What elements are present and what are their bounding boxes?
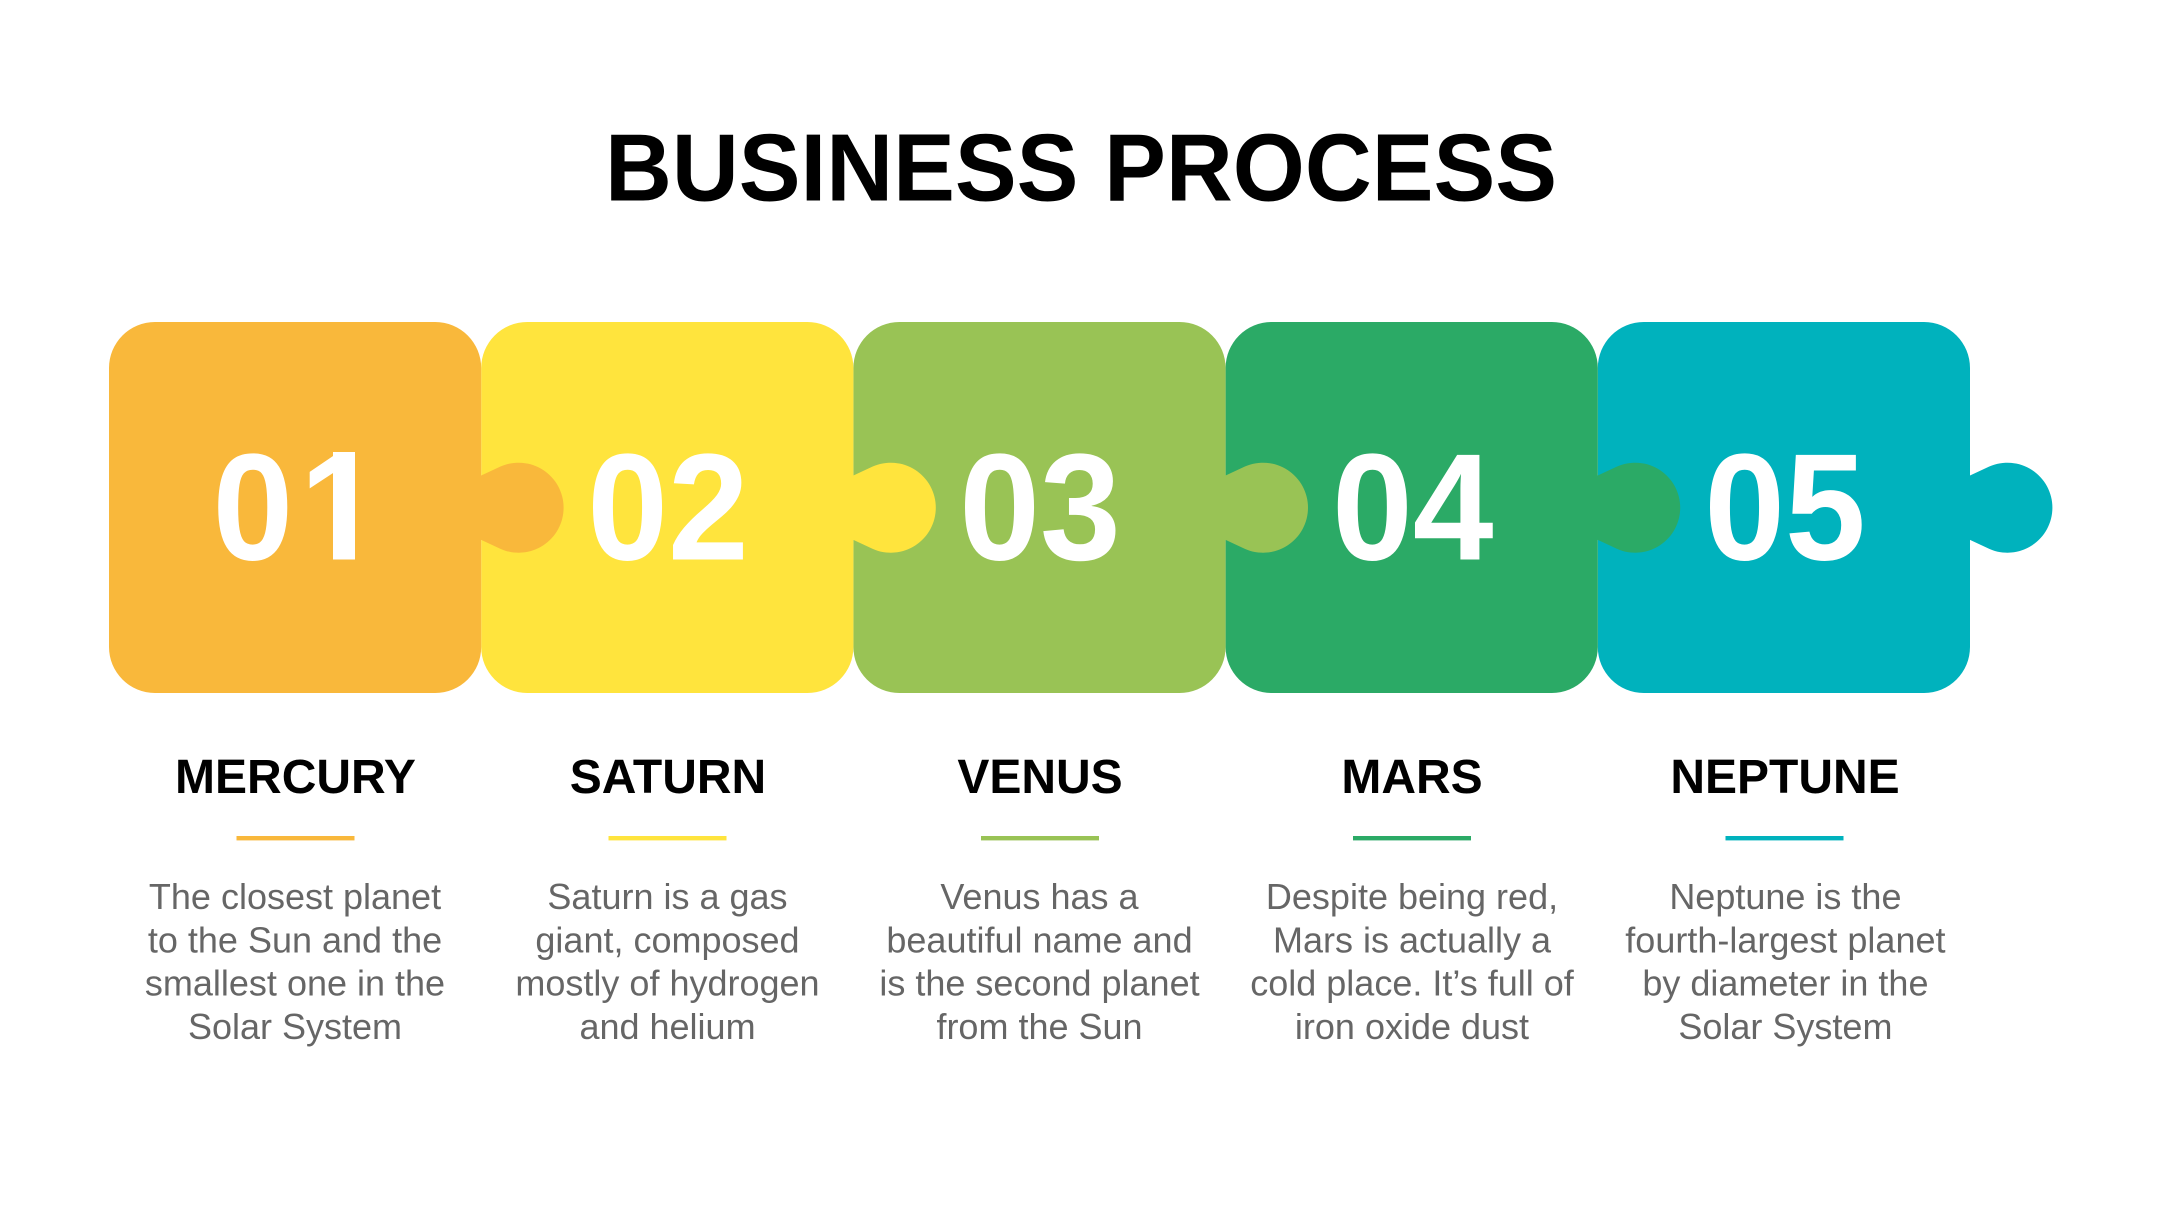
- rule: Neptune: [1726, 836, 1844, 840]
- rule: Mercury: [236, 836, 354, 840]
- heading: Mars: MARS: [1341, 751, 1483, 804]
- description: Venus: Venus has a: [940, 876, 1140, 917]
- heading: Mercury: MERCURY: [175, 751, 416, 804]
- description: Neptune: Neptune is the: [1669, 876, 1901, 917]
- description: Mars: Despite being red,: [1266, 876, 1558, 917]
- description: Saturn: mostly of hydrogen: [515, 963, 820, 1004]
- puzzle piece 02: [481, 322, 936, 693]
- column: Neptune: [1625, 751, 1945, 1047]
- rule: Saturn: [608, 836, 726, 840]
- puzzle piece 02: 02: [587, 422, 749, 592]
- description: Mercury: to the Sun and the: [148, 919, 442, 960]
- column: Mars: [1250, 751, 1575, 1047]
- description: Venus: beautiful name and: [886, 919, 1193, 960]
- column: Saturn: [515, 751, 820, 1047]
- puzzle piece 05: 05: [1704, 422, 1866, 592]
- puzzle piece 01: 1: [300, 422, 381, 592]
- description: Mars: Mars is actually a: [1273, 919, 1552, 960]
- puzzle piece 04: 04: [1332, 422, 1494, 592]
- puzzle piece 01: 0: [212, 422, 293, 592]
- puzzle piece 01: [109, 322, 564, 693]
- column: Mercury: [145, 751, 445, 1047]
- description: Venus: from the Sun: [936, 1006, 1143, 1047]
- rule: Venus: [981, 836, 1099, 840]
- description: Mars: iron oxide dust: [1295, 1006, 1529, 1047]
- description: Mercury: The closest planet: [149, 876, 441, 917]
- puzzle piece 03: [853, 322, 1308, 693]
- title: BUSINESS PROCESS: [605, 115, 1557, 222]
- puzzle piece 05: [1598, 322, 2052, 693]
- description: Mercury: smallest one in the: [145, 963, 445, 1004]
- description: Venus: is the second planet: [879, 963, 1200, 1004]
- description: Saturn: giant, composed: [535, 919, 800, 960]
- description: Mercury: Solar System: [188, 1006, 402, 1047]
- puzzle piece 04: [1226, 322, 1680, 693]
- puzzle piece 03: 03: [959, 422, 1121, 592]
- description: Mars: cold place. It’s full of: [1250, 963, 1575, 1004]
- description: Neptune: fourth-largest planet: [1625, 919, 1945, 960]
- description: Saturn: Saturn is a gas: [547, 876, 788, 917]
- heading: Saturn: SATURN: [570, 751, 766, 804]
- column: Venus: [879, 751, 1200, 1047]
- description: Neptune: by diameter in the: [1642, 963, 1928, 1004]
- heading: Venus: VENUS: [957, 751, 1123, 804]
- description: Neptune: Solar System: [1678, 1006, 1892, 1047]
- description: Saturn: and helium: [579, 1006, 756, 1047]
- rule: Mars: [1353, 836, 1471, 840]
- heading: Neptune: NEPTUNE: [1670, 751, 1900, 804]
